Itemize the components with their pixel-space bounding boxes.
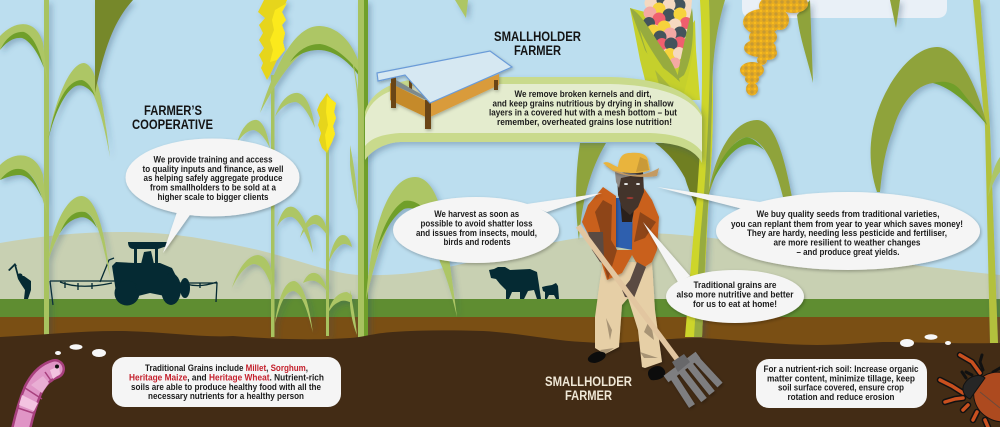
leaf: top left — [0, 24, 48, 85]
leaf: mid right arch — [708, 120, 792, 197]
speech bubble: harvest: and issues from insects, mould, — [416, 228, 537, 239]
speech bubble: harvest — [393, 193, 602, 263]
text box: traditional grains: Traditional Grains include Millet, Sorghum, — [145, 363, 312, 374]
leaf: big right — [871, 47, 987, 192]
speech bubble: cooperative: as helping safely aggregate produce — [144, 173, 282, 184]
heading: farmer's cooperative: FARMER’S — [144, 103, 202, 118]
pitchfork head — [666, 354, 720, 406]
speech bubble: harvest: birds and rodents — [444, 237, 510, 248]
heading: smallholder farmer top: SMALLHOLDER — [494, 29, 581, 44]
speech bubble: traditional grains: Traditional grains are — [694, 280, 776, 291]
heading: smallholder farmer bottom: SMALLHOLDER — [545, 374, 632, 389]
speech bubble: seeds: you can replant them from year to year which saves money! — [731, 219, 963, 230]
speech bubble: traditional grains: for us to eat at home! — [693, 299, 777, 310]
speech bubble: seeds: We buy quality seeds from traditional varieties, — [756, 209, 940, 220]
corn stalk — [685, 0, 725, 337]
leaf: olive below banner — [655, 143, 702, 222]
text box: nutrient-rich soil: rotation and reduce erosion — [788, 392, 895, 403]
leaf: behind farmer — [576, 143, 606, 240]
text box: traditional grains — [112, 357, 341, 407]
panel text: drying: We remove broken kernels and dirt, — [514, 89, 652, 100]
text box: traditional grains: Heritage Maize, and Heritage Wheat. Nutrient-rich — [129, 372, 332, 384]
forearms — [588, 232, 646, 298]
leaf: lower arch — [48, 196, 110, 277]
trousers — [595, 262, 662, 368]
corn cob with husk — [630, 0, 700, 100]
speech bubble: seeds: They are hardy, needing less pesticide and fertiliser, — [747, 228, 947, 239]
thought bubbles: beetle — [900, 334, 951, 347]
speech bubble: cooperative: We provide training and access — [154, 154, 272, 166]
heading: smallholder farmer top: FARMER — [514, 43, 561, 58]
brown earth band — [0, 317, 1000, 349]
left stalk — [44, 0, 49, 336]
wheat stalks — [271, 75, 329, 337]
heading: farmer's cooperative: COOPERATIVE — [132, 117, 213, 132]
speech bubble: cooperative — [126, 138, 300, 253]
head — [617, 172, 644, 215]
cob base — [646, 0, 692, 70]
leaf: beside centre stalk left — [350, 50, 358, 335]
neck — [620, 198, 636, 222]
pitchfork handle — [578, 226, 677, 359]
speech bubble: seeds: – and produce great yields. — [796, 247, 900, 258]
leaf: upper left arch — [48, 63, 110, 157]
hills — [0, 232, 1000, 300]
leaf: olive hanging leaf — [95, 0, 133, 93]
speech bubble: seeds: are more resilient to weather changes — [774, 238, 920, 248]
speech bubble: harvest: We harvest as soon as — [434, 209, 519, 220]
main centre stalk — [358, 0, 368, 340]
shirt — [615, 198, 633, 250]
panel text: drying: remember, overheated grains lose nutrition! — [497, 117, 672, 128]
farmer — [578, 153, 720, 406]
leaf: top small right — [890, 0, 900, 28]
kernels — [643, 0, 692, 68]
text box: traditional grains: necessary nutrients for a healthy person — [148, 391, 304, 402]
cloud — [742, 0, 947, 18]
jacket — [582, 187, 659, 280]
text box: traditional grains: soils are able to produce healthy food with all the — [131, 382, 321, 393]
thought bubbles: worm — [55, 344, 106, 357]
text box: nutrient-rich soil — [756, 359, 927, 408]
leaf: millet hanging — [797, 0, 813, 83]
leaf: centre right arch — [366, 177, 457, 317]
speech bubble: cooperative: to quality inputs and finance, as well — [142, 164, 284, 175]
drying hut — [377, 51, 512, 129]
shoes — [588, 352, 665, 380]
leaf: lower left — [0, 155, 47, 215]
speech bubble: traditional grains — [643, 222, 804, 323]
leaves: wheat cluster — [232, 93, 352, 333]
speech bubble: cooperative: from smallholders to be sold at a — [150, 182, 277, 194]
grass band — [0, 299, 1000, 318]
millet head — [740, 0, 808, 96]
text box: nutrient-rich soil: For a nutrient-rich soil: Increase organic — [764, 364, 918, 375]
jacket folds — [595, 200, 656, 280]
heading: smallholder farmer bottom: FARMER — [565, 388, 612, 403]
panel text: drying: and keep grains nutritious by drying in shallow — [492, 98, 674, 110]
wheat head: short — [317, 93, 336, 153]
text box: nutrient-rich soil: soil surface covered, ensure crop — [778, 382, 904, 394]
text box: nutrient-rich soil: matter content, minimize tillage, keep — [767, 373, 915, 384]
husk leaves — [630, 8, 680, 82]
speech bubble: harvest: possible to avoid shatter loss — [420, 218, 532, 230]
eyes and mouth — [624, 183, 640, 199]
hat — [603, 153, 659, 177]
leaf: top thin — [455, 0, 468, 18]
silhouette: farm worker with hoe — [8, 263, 31, 299]
soil — [0, 330, 1000, 427]
silhouette: cow and calf — [489, 267, 559, 299]
leaf: far right edge — [988, 157, 1000, 197]
wheat head: tall — [258, 0, 287, 80]
speech bubble: traditional grains: also more nutritive and better — [676, 290, 794, 300]
hair — [615, 172, 640, 188]
husk back — [630, 8, 697, 100]
silhouette: tractor with harrow — [50, 242, 217, 306]
right stalk — [973, 0, 998, 343]
banner leaf panel — [365, 77, 702, 163]
leaf: big upper wheat leaf — [260, 26, 362, 113]
beetle — [940, 355, 1000, 427]
speech bubble: seeds — [657, 187, 980, 270]
speech bubble: cooperative: higher scale to bigger clients — [158, 192, 268, 203]
panel text: drying: layers in a covered hut with a mesh bottom – but — [489, 108, 678, 118]
worm — [18, 364, 60, 427]
